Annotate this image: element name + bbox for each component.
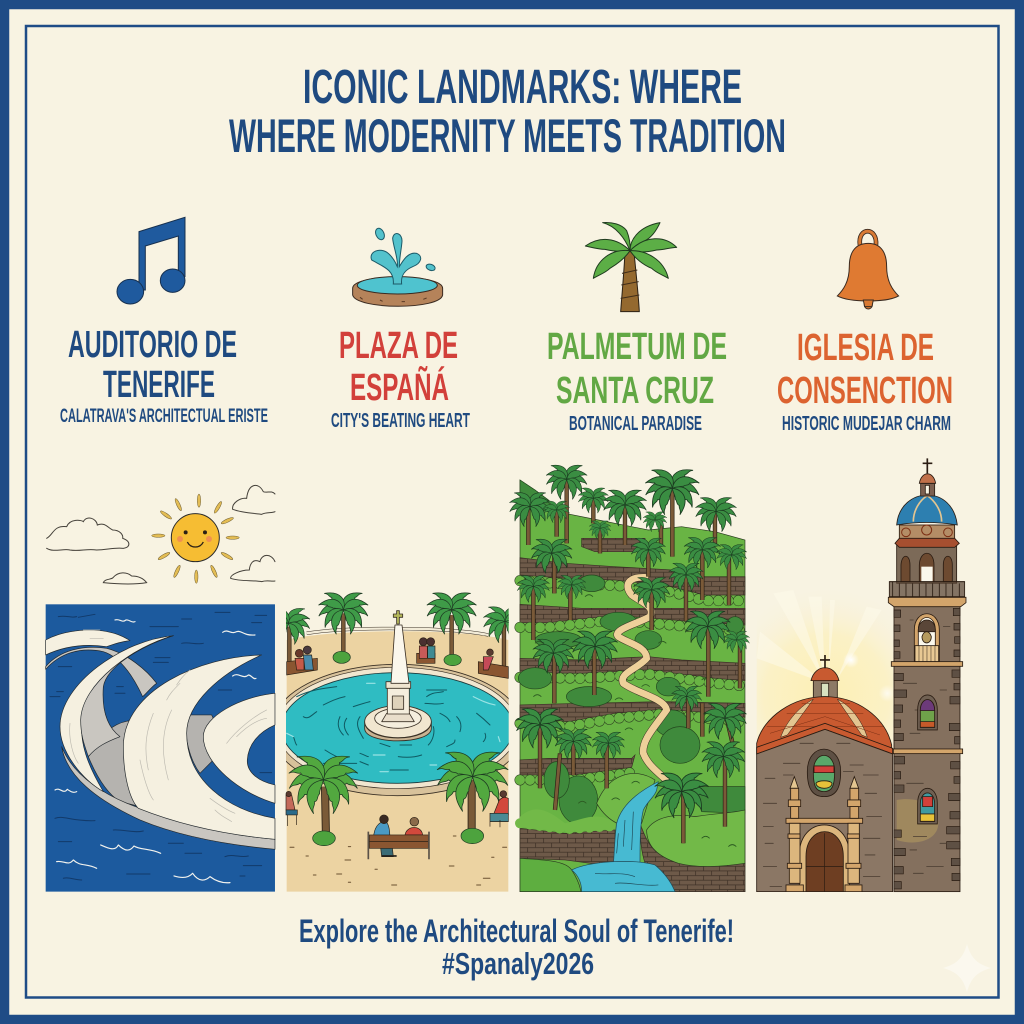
column: Auditorio de Tenerife text: AUDITORIO DE [68,324,237,366]
footer call to action [299,913,734,981]
light bushes [520,595,745,892]
palms back [286,592,509,666]
sea [46,604,275,892]
low wall [307,629,488,635]
footer call to action: Explore the Architectural Soul of Tenerife! [299,913,734,949]
column: Palmetum de Santa Cruz text: SANTA CRUZ [556,370,714,412]
panel: Plaza de España illustration [286,592,509,892]
scalloped shrubs along terraces [520,581,745,827]
sun [152,494,239,583]
portal [786,777,863,892]
column: Iglesia de Consenction text: IGLESIA DE [797,327,934,369]
fountain basin [286,664,509,796]
panel: Iglesia illustration [757,458,966,892]
panel: Palmetum illustration [509,460,750,892]
column: Auditorio de Tenerife text: CALATRAVA'S ARCHITECTUAL ERISTE [60,406,268,427]
monument [365,611,431,741]
column: Iglesia de Consenction text [777,327,953,435]
column: Plaza de España text: CITY'S BEATING HEART [331,410,470,432]
palm trunks [528,480,740,843]
column: Plaza de España text [331,325,470,432]
panel: Auditorio illustration [46,485,275,892]
sail structures [46,630,275,849]
column: Auditorio de Tenerife text: TENERIFE [103,364,215,406]
church rose window [807,749,841,797]
path [617,577,670,783]
sparkle mark [943,944,991,992]
waves [50,612,272,883]
stone terraces [520,538,745,892]
column: Palmetum de Santa Cruz text: BOTANICAL PARADISE [569,413,702,435]
ground marks [290,836,507,885]
hill [520,480,745,892]
clouds [47,485,275,584]
waterfall and pool [572,782,675,892]
icon: bell [837,231,899,309]
church dome [757,655,892,753]
plaza ground [287,631,508,892]
title: ICONIC LANDMARKS: WHERE [303,61,742,114]
tower windows [918,695,937,824]
central bench with two people [368,815,429,859]
back benches and visitors [287,638,508,678]
tower [888,458,966,892]
column: Palmetum de Santa Cruz text [547,326,727,435]
quoin stones [894,608,960,889]
stone marks [763,620,950,887]
sun glow [757,583,896,757]
icon: palm tree [585,223,677,312]
column: Plaza de España text: PLAZA DE [339,325,458,367]
column: Auditorio de Tenerife text [60,324,268,427]
icon: fountain [353,227,443,306]
palms front [289,743,508,846]
dark bushes [518,480,745,824]
icon: music note [117,217,185,304]
column: Palmetum de Santa Cruz text: PALMETUM DE [547,326,727,368]
palm crowns [509,460,750,818]
footer call to action: #Spanaly2026 [442,946,594,981]
side visitors [286,791,508,827]
column: Plaza de España text: ESPAÑÁ [350,365,449,409]
title [229,61,786,162]
church facade [757,723,893,892]
